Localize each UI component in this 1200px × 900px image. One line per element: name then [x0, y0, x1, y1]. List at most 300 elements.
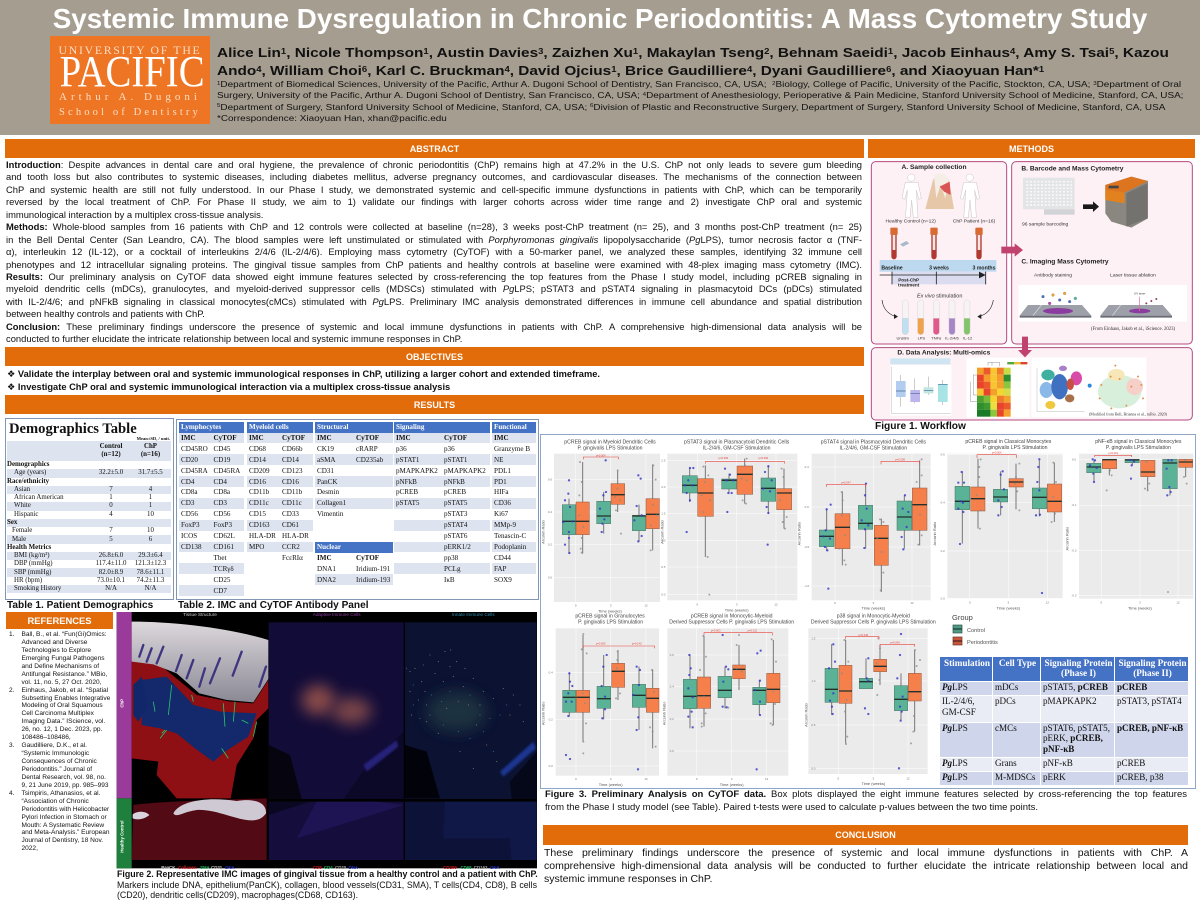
- table: myeloid cells: CD16: [249, 478, 266, 486]
- table: lymphocytes: CD19: [214, 456, 230, 464]
- chart: pCREB in myeloid dendritic cells: 0.0: [548, 575, 552, 579]
- patient demographics table: 1: [149, 502, 152, 509]
- affiliations and correspondence: 1Department of Biomedical Sciences, University of the Pacific, Arthur A. Dugoni School of Dentistry, San Francisco, CA, USA; 2Biology, College of Pacific, University of the Pacific, Stockton, CA, USA; 3Department of Oral: [217, 79, 1181, 89]
- patient demographics table: White: [14, 502, 31, 509]
- logo: University of the Pacific: Arthur A. Dugoni: [59, 91, 201, 103]
- table: myeloid cells: CD16: [282, 478, 299, 486]
- table: stimulation and signaling proteins: Grans: [995, 758, 1017, 768]
- chart: pCREB in granulocytes: p=0.140: [632, 642, 642, 646]
- chart: pCREB in granulocytes: p=0.005: [596, 642, 606, 646]
- chart: pSTAT3 in plasmacytoid dendritic cells: 1.5: [661, 512, 666, 516]
- table: stimulation and signaling proteins: (Phase I): [1061, 668, 1096, 678]
- chart: pNF-kB in classical monocytes: -0.1: [1071, 503, 1077, 507]
- table: functional: PD1: [494, 478, 507, 486]
- title: Systemic Immune Dysregulation in Chronic Periodontitis: A Mass Cytometry Study: [53, 3, 1147, 34]
- chart: pCREB in classical monocytes: p=0.004: [992, 451, 1002, 455]
- caption: table 2: Table 2. IMC and CyTOF Antibody Panel: [178, 600, 368, 611]
- strip: ChP: ChP: [120, 699, 125, 708]
- patient demographics table: African American: [14, 494, 64, 501]
- chart: p38 in monocytic MDSCs: [804, 613, 936, 786]
- table: structural: Structural: [317, 423, 349, 431]
- table: functional: MMp-9: [494, 521, 516, 529]
- chart: pCREB in monocytic MDSCs: p=0.003: [711, 629, 721, 633]
- references list: 4.: [9, 790, 14, 797]
- legend: marker colours: [161, 865, 501, 870]
- table: nuclear: Nuclear: [317, 543, 341, 551]
- heading: conclusion: CONCLUSION: [835, 830, 896, 840]
- table: lymphocytes: CD8a: [181, 488, 198, 496]
- patient demographics table: 117.4±11.0: [96, 560, 126, 567]
- table: myeloid cells: CD61: [282, 521, 299, 529]
- chart: pSTAT3 in plasmacytoid dendritic cells: 0.0: [661, 592, 666, 596]
- table: lymphocytes: TCRγδ: [214, 565, 234, 573]
- patient demographics table: 6: [149, 536, 152, 543]
- chart: p38 in monocytic MDSCs: 0: [837, 776, 839, 780]
- table: nuclear: DNA2: [317, 576, 336, 584]
- table: structural: Desmin: [317, 488, 339, 496]
- references list: Mouth: A Systematic Review: [22, 822, 104, 828]
- chart: pCREB in myeloid dendritic cells: Arcsinh Ratio: [541, 519, 546, 544]
- patient demographics table: 5: [109, 536, 113, 543]
- table: structural: [315, 422, 393, 518]
- chart: pSTAT4 in plasmacytoid dendritic cells: -0.5: [804, 545, 810, 549]
- abstract text: and tooth loss but also contributes to systemic diseases, including diabetes mellitus, adverse pregnancy outcomes, and cardiovascular diseases. The mechanisms of the connection between: [6, 171, 862, 182]
- strip: Healthy Control: Healthy Control: [120, 821, 125, 853]
- chart: pCREB in myeloid dendritic cells: Time (weeks): [598, 609, 623, 614]
- table: myeloid cells: HLA-DR: [282, 532, 309, 540]
- timeline: 3 months: [973, 265, 996, 271]
- patient demographics table: SBP (mmHg): [14, 569, 51, 576]
- table: lymphocytes: CyTOF: [214, 434, 237, 442]
- table: signaling: pp38: [444, 554, 458, 562]
- chart: pCREB in myeloid dendritic cells: [541, 440, 660, 614]
- caption: figure 3: from the Phase I study model (see Table). Paired t-tests were used to calculate p-values between the two time points.: [545, 802, 1038, 813]
- table: lymphocytes: Tbet: [214, 554, 226, 562]
- references list: 26, no. 12, 1 Dec. 2023, pp.: [22, 726, 102, 733]
- table: signaling: pCREB: [444, 488, 466, 496]
- table: stimulation and signaling proteins: pDCs: [995, 696, 1016, 706]
- table: signaling: Signaling: [396, 423, 424, 431]
- patient demographics table: Smoking History: [14, 585, 61, 592]
- timeline: treatment: [898, 282, 920, 287]
- table: functional: NE: [494, 456, 503, 464]
- references list: 2022,: [22, 845, 38, 852]
- chart: pSTAT4 in plasmacytoid dendritic cells: 0.4: [805, 465, 809, 469]
- chart: pSTAT4 in plasmacytoid dendritic cells: [797, 440, 931, 610]
- references list: “Association of Chronic: [22, 798, 89, 805]
- panel: antibody panel table: [176, 419, 539, 600]
- table: myeloid cells: FcεRIα: [282, 554, 303, 562]
- figure 3: box plots: [540, 434, 1196, 789]
- patient demographics table: Control: [100, 442, 122, 450]
- panel D: data analysis: (Modified from Bell, Brianna et al., mBio. 2020): [1089, 411, 1168, 417]
- heading: objectives: OBJECTIVES: [406, 352, 463, 362]
- icon: mass cytometer: [1105, 177, 1148, 228]
- table: stimulation and signaling proteins: pCREB: [1117, 682, 1147, 692]
- legend: group: Group: [952, 613, 973, 622]
- caption: figure 2: [117, 869, 538, 900]
- table: myeloid cells: CyTOF: [282, 434, 305, 442]
- chart: pCREB in granulocytes: 0.2: [549, 717, 553, 721]
- table: functional: Podoplanin: [494, 543, 526, 551]
- chart: p38 in monocytic MDSCs: p38 signal in Monocytic-Myeloid: [837, 613, 910, 619]
- chart: pCREB in monocytic MDSCs: [661, 613, 794, 787]
- chart: pNF-kB in classical monocytes: p=0.021: [1108, 451, 1119, 455]
- table: functional: SOX9: [494, 576, 512, 584]
- table: myeloid cells: CD163: [249, 521, 270, 529]
- table: myeloid cells: CD66b: [282, 445, 302, 453]
- table: signaling: p36: [444, 445, 455, 453]
- chart: pCREB in monocytic MDSCs: 0.4: [670, 684, 674, 688]
- references list: Technologies to Explore: [22, 647, 91, 654]
- references list: 9, 21 June 2019, pp. 985–993: [22, 782, 109, 789]
- timeline: Baseline: [881, 265, 903, 271]
- table: stimulation and signaling proteins: Signaling Protein: [1044, 658, 1112, 668]
- chart: pCREB in classical monocytes: P. gingivalis LPS Stimulation: [983, 445, 1048, 451]
- table: stimulation and signaling proteins: pSTAT5, pCREB: [1043, 682, 1108, 692]
- table: lymphocytes: CD45RO: [181, 445, 208, 453]
- abstract text: ChP and systemic health are still not fully understood. In our Phase I study, we demonstrated systemic and cell-specific immune dysfunctions in patients with ChP, which can be temporarily: [6, 184, 862, 195]
- table: myeloid cells: Myeloid cells: [249, 423, 289, 431]
- chart: pSTAT3 in plasmacytoid dendritic cells: pSTAT3 signal in Plasmacytoid Dendritic Cells: [684, 440, 790, 446]
- panel D: data analysis: D. Data Analysis: Multi-omics: [897, 349, 991, 356]
- timeline: Post-ChP: [898, 277, 919, 282]
- panel: demographics table: [5, 418, 174, 600]
- table: stimulation and signaling proteins: PgLPS: [942, 682, 968, 692]
- patient demographics table: N/A: [145, 585, 156, 592]
- table: myeloid cells: CD11b: [249, 488, 269, 496]
- references list: Consequences of Chronic: [22, 758, 97, 765]
- table: lymphocytes: FoxP3: [181, 521, 200, 529]
- panel A: sample collection: IL-12: [963, 335, 973, 340]
- strip: ChP: [117, 612, 132, 798]
- table: signaling: pSTAT1: [444, 456, 467, 464]
- table: stimulation and signaling proteins: Stimulation: [944, 658, 990, 668]
- references list: Subsetting Enables Integrative: [22, 694, 110, 702]
- references list: 1.: [9, 631, 14, 638]
- table: stimulation and signaling proteins: M-MDSCs: [995, 772, 1035, 782]
- chart: p38 in monocytic MDSCs: 1.5: [811, 636, 816, 640]
- table: nuclear: Iridium-193: [356, 576, 390, 584]
- table: signaling: IMC: [396, 434, 411, 442]
- heading: references: REFERENCES: [27, 615, 92, 626]
- abstract text: phenotypes and 12 intracellular signaling proteins. The gingival tissue samples from ChP patients and healthy controls at baseline were examined with 48-plex imaging mass cytometry (IMC).: [6, 258, 862, 270]
- panel B and C: mass cytometry: UV laser: [1134, 291, 1145, 295]
- chart: pCREB in classical monocytes: 12: [1046, 600, 1049, 604]
- chart: pNF-kB in classical monocytes: -0.3: [1071, 593, 1077, 597]
- table: lymphocytes: CD20: [181, 456, 198, 464]
- table: stimulation and signaling proteins: pERK: [1043, 772, 1066, 782]
- objectives list: ❖ Investigate ChP oral and systemic immunological interaction via a multiplex cross-tissue analysis: [7, 382, 450, 393]
- patient demographics table: 29.3±6.4: [138, 552, 163, 559]
- table: stimulation and signaling proteins: [940, 657, 1188, 785]
- chart: pCREB in monocytic MDSCs: 3: [731, 777, 733, 781]
- chart: pCREB in granulocytes: 12: [644, 777, 648, 781]
- abstract text: Methods: Whole-blood samples from 16 patients with ChP and 12 controls were collected at baseline (n=28), 3 weeks post-ChP treatment (n= 25), and 3 months post-ChP treatment (n= 25): [6, 221, 862, 232]
- references list: Ball, B., et al. “Fun(Gi)Omics:: [22, 631, 107, 638]
- references list: Advanced and Diverse: [22, 639, 87, 646]
- abstract text: reversed by the local treatment of ChP. For Phase II study, we aim to 1) validate our findings with larger cohorts across wider time range and 2) investigate ChP oral and systemic: [6, 196, 862, 207]
- references list: Tsimpiris, Athanasios, et al.: [22, 790, 100, 797]
- patient demographics table: 31.7±5.5: [138, 469, 163, 476]
- patient demographics table: Male: [12, 536, 26, 543]
- chart: pCREB in classical monocytes: 0.2: [941, 549, 945, 553]
- chart: pCREB in granulocytes: pCREB signal in Granulocytes: [575, 613, 645, 619]
- table: lymphocytes: CD25: [214, 576, 230, 584]
- panel A: sample collection: LPS: [918, 335, 925, 340]
- panel: innate immune cells: [405, 612, 537, 860]
- panel B and C: mass cytometry: B. Barcode and Mass Cytometry: [1021, 166, 1124, 173]
- chart: pSTAT4 in plasmacytoid dendritic cells: p=0.047: [841, 481, 851, 485]
- chart: pSTAT4 in plasmacytoid dendritic cells: IL-2/4/6, GM-CSF Stimulation: [840, 446, 907, 452]
- chart: pSTAT4 in plasmacytoid dendritic cells: Time (weeks): [861, 605, 886, 610]
- patient demographics table: 74.2±11.3: [137, 577, 164, 584]
- chart: pSTAT4 in plasmacytoid dendritic cells: Arcsinh Ratio: [797, 521, 802, 546]
- patient demographics table: Female: [12, 527, 32, 534]
- chart: pCREB in myeloid dendritic cells: 0.6: [548, 478, 552, 482]
- chart: pSTAT4 in plasmacytoid dendritic cells: pSTAT4 signal in Plasmacytoid Dendritic Cells: [821, 440, 926, 446]
- chart: pCREB in classical monocytes: pCREB signal in Classical Monocytes: [965, 439, 1052, 445]
- chart: pCREB in monocytic MDSCs: 0.6: [670, 653, 674, 657]
- table: signaling: PCLg: [444, 565, 461, 573]
- table: stimulation and signaling proteins: pCREB: [1117, 758, 1145, 768]
- patient demographics table: Health Metrics: [7, 544, 51, 551]
- patient demographics table: Asian: [14, 486, 30, 493]
- table: signaling: pSTAT3: [444, 510, 467, 518]
- heading: abstract: [5, 139, 864, 158]
- chart: pCREB in myeloid dendritic cells: pCREB signal in Myeloid Dendritic Cells: [564, 440, 656, 446]
- table: functional: PDL1: [494, 467, 511, 475]
- chart: pSTAT3 in plasmacytoid dendritic cells: 1.0: [661, 538, 666, 542]
- panel A: sample collection: [871, 162, 1007, 344]
- panel A: sample collection: TNFα: [931, 335, 942, 340]
- chart: pCREB in granulocytes: 0: [575, 777, 577, 781]
- table: nuclear: DNA1: [317, 565, 336, 573]
- panel A: sample collection: IL-2/4/6: [945, 335, 960, 340]
- chart: pNF-kB in classical monocytes: 0: [1100, 600, 1102, 604]
- patient demographics table: BMI (kg/m²): [14, 552, 50, 559]
- chart: pSTAT3 in plasmacytoid dendritic cells: 0.5: [661, 565, 666, 569]
- table: signaling: CyTOF: [444, 434, 467, 442]
- mini tSNE plots: [1031, 357, 1146, 417]
- patient demographics table: HR (bpm): [14, 577, 42, 584]
- authors: [217, 46, 1169, 78]
- table: functional: FAP: [494, 565, 506, 573]
- table: structural: CD31: [317, 467, 334, 475]
- chart: pSTAT4 in plasmacytoid dendritic cells: p=0.009: [895, 457, 905, 461]
- patient demographics table: 121.3±12.3: [135, 560, 166, 567]
- strip: Healthy Control: [117, 798, 132, 868]
- references list: Periodontitis.” Journal of: [22, 766, 92, 773]
- table: stimulation and signaling proteins: Signaling Protein: [1118, 658, 1186, 668]
- panel A: sample collection: Unstim: [896, 335, 910, 340]
- references list: Antifungal Resistance.” MBio,: [22, 671, 107, 678]
- abstract text: with IL-2/4/6; and pNFkB signaling in classical monocytes(cMCs) stimulated with PgLPS. Preliminary IMC analysis demonstrated differences in immune cell abundance and spatial distribution: [6, 296, 862, 307]
- patient demographics table: 26.8±6.0: [99, 552, 123, 559]
- chart: pCREB in monocytic MDSCs: 12: [765, 777, 769, 781]
- panel B and C: mass cytometry: C. Imaging Mass Cytometry: [1021, 258, 1109, 265]
- references list: “Systemic Immunologic: [22, 750, 89, 757]
- chart: pCREB in monocytic MDSCs: p=0.012: [747, 629, 758, 633]
- chart: pNF-kB in classical monocytes: P. gingivalis LPS Stimulation: [1106, 445, 1171, 451]
- heading: results: RESULTS: [414, 400, 455, 410]
- affiliations and correspondence: Surgery, University of the Pacific, Arthur A. Dugoni School of Dentistry, San Francisco, CA, USA; 4Department of Anesthesiology, Perioperative & Pain Medicine, Stanford University School of Medicine, Stanford, CA, USA;: [217, 90, 1183, 100]
- conclusion text: These preliminary findings underscore the presence of systemic and local immune dysfunctions in patients with ChP. A: [544, 847, 1188, 859]
- table: stimulation and signaling proteins: PgLPS: [942, 772, 968, 782]
- table: nuclear: CyTOF: [356, 554, 379, 562]
- table: myeloid cells: CCR2: [282, 543, 300, 551]
- table: myeloid cells: CD15: [249, 510, 266, 518]
- panel A: sample collection: Healthy Control (n=12): [886, 219, 936, 225]
- objectives list: [7, 369, 600, 393]
- patient demographics table: 4: [149, 486, 152, 493]
- chart: pSTAT3 in plasmacytoid dendritic cells: 2.0: [661, 485, 666, 489]
- table: lymphocytes: IMC: [181, 434, 196, 442]
- chart: pCREB in monocytic MDSCs: Arcsinh Ratio: [661, 701, 666, 725]
- patient demographics table: 7: [109, 527, 113, 534]
- chart: pCREB in classical monocytes: 0.6: [941, 453, 945, 457]
- panel A: sample collection: Ex vivo stimulation: [917, 294, 962, 300]
- panel: adaptive immune cells: Adaptive Immune Cells: [313, 612, 361, 617]
- chart: pNF-kB in classical monocytes: 0.0: [1072, 457, 1076, 461]
- legend: group: Periodontitis: [967, 640, 998, 646]
- patient demographics table: 82.0±8.9: [99, 569, 123, 576]
- chart: pNF-kB in classical monocytes: -0.2: [1071, 548, 1077, 552]
- heading: references: [6, 612, 113, 629]
- table: structural: PanCK: [317, 478, 338, 486]
- table: lymphocytes: CD45RA: [181, 467, 208, 475]
- references list: Pylori Infection in Stomach or: [22, 814, 107, 821]
- conclusion text: [544, 847, 1188, 885]
- chart: pCREB in monocytic MDSCs: 0.0: [670, 749, 674, 753]
- table: stimulation and signaling proteins: cMCs: [995, 723, 1017, 733]
- table: lymphocytes: CD3: [181, 499, 194, 507]
- table: lymphocytes: CD8a: [214, 488, 230, 496]
- table: myeloid cells: CD14: [249, 456, 266, 464]
- heading: results: [5, 395, 864, 414]
- conclusion text: systemic immune responses in ChP.: [544, 873, 712, 885]
- chart: pSTAT3 in plasmacytoid dendritic cells: 3: [736, 602, 738, 606]
- figure 1: workflow: [870, 161, 1193, 420]
- patient demographics table: Demographics: [7, 461, 50, 468]
- table: signaling: pSTAT1: [396, 456, 419, 464]
- panel B and C: mass cytometry: Laser tissue ablation: [1110, 273, 1156, 279]
- affiliations and correspondence: [217, 79, 1183, 123]
- timeline: 3 weeks: [929, 265, 949, 271]
- chart: p38 in monocytic MDSCs: Derived Suppressor Cells P. gingivalis LPS Stimulation: [811, 620, 936, 626]
- table: stimulation and signaling proteins: mDCs: [995, 682, 1018, 692]
- chart: pNF-kB in classical monocytes: [1064, 439, 1193, 610]
- chart: p38 in monocytic MDSCs: 0.5: [811, 723, 816, 727]
- table: lymphocytes: CD56: [181, 510, 198, 518]
- chart: pCREB in myeloid dendritic cells: 0.4: [548, 510, 552, 514]
- panel: innate immune cells: Innate Immune Cells: [452, 612, 495, 617]
- table: functional: HIFa: [494, 488, 509, 496]
- chart: pCREB in classical monocytes: [932, 439, 1063, 610]
- legend: group: [952, 613, 998, 646]
- figure 2: IMC images: [116, 612, 537, 869]
- table: lymphocytes: CD138: [181, 543, 202, 551]
- abstract text: Introduction: Despite advances in dental care and oral hygiene, the prevalence of chronic periodontitis (ChP) remains high at 47.2% in the U.S. ChP not only leads to severe gum bleeding: [6, 159, 862, 170]
- table: stimulation and signaling proteins: pNF-κB: [1043, 758, 1073, 768]
- chart: p38 in monocytic MDSCs: 3: [872, 776, 874, 780]
- table: signaling: pSTAT4: [444, 521, 467, 529]
- table: myeloid cells: CD11c: [249, 499, 269, 507]
- caption: figure 2: (CD20), dendritic cells(CD209), macrophages(CD68, CD163).: [117, 890, 358, 900]
- table: nuclear: IMC: [317, 554, 332, 562]
- patient demographics table: (n=16): [141, 451, 160, 458]
- panel: tissue structure: Tissue Structure: [183, 612, 217, 617]
- references list: Periodontitis with Helicobacter: [22, 806, 109, 813]
- patient demographics table: Age (years): [14, 469, 46, 476]
- table: stimulation and signaling proteins: pSTAT6, pSTAT5,: [1043, 723, 1110, 733]
- table: signaling: pCREB: [396, 488, 418, 496]
- chart: pSTAT3 in plasmacytoid dendritic cells: 0: [696, 602, 698, 606]
- legend: group: Control: [967, 628, 985, 634]
- mini boxplot: [890, 358, 951, 416]
- references list: vol. 11, no. 5, 27 Oct. 2020,: [22, 679, 101, 686]
- chart: pCREB in monocytic MDSCs: Derived Suppressor Cells P. gingivalis LPS Stimulation: [669, 620, 794, 626]
- table: stimulation and signaling proteins: Cell Type: [999, 658, 1036, 668]
- abstract text: Conclusion: These preliminary findings underscore the presence of systemic and local immune dysfunctions in patients with ChP. A comprehensive high-dimensional data analysis will be: [6, 321, 862, 332]
- abstract text: [6, 159, 862, 344]
- chart: p38 in monocytic MDSCs: Arcsinh Ratio: [804, 702, 809, 727]
- chart: pCREB in granulocytes: [541, 613, 659, 787]
- chart: pSTAT3 in plasmacytoid dendritic cells: [659, 440, 797, 612]
- references list: 2.: [9, 687, 14, 694]
- logo: University of the Pacific: School of Dentistry: [59, 107, 201, 118]
- demographics heading: Demographics Table: [9, 421, 137, 437]
- patient demographics table: 1: [149, 494, 152, 501]
- table: myeloid cells: MPO: [249, 543, 264, 551]
- patient demographics table: ChP: [144, 442, 157, 450]
- table: nuclear: [315, 542, 393, 585]
- chart: pSTAT4 in plasmacytoid dendritic cells: -1.0: [804, 584, 810, 588]
- panel B and C: mass cytometry: (From Einhaus, Jakob et al., iScience. 2023): [1091, 327, 1175, 332]
- table: signaling: pSTAT5: [396, 499, 419, 507]
- logo: University of the Pacific: [50, 36, 210, 124]
- chart: pCREB in monocytic MDSCs: 0: [696, 777, 698, 781]
- table: myeloid cells: CD209: [249, 467, 270, 475]
- table: stimulation and signaling proteins: IL-2/4/6,: [942, 696, 975, 706]
- references list: Emerging Fungal Pathogens: [22, 655, 104, 662]
- patient demographics table: Sex: [7, 519, 17, 526]
- table: lymphocytes: FoxP3: [214, 521, 232, 529]
- logo: University of the Pacific: UNIVERSITY OF THE: [59, 43, 201, 57]
- table: stimulation and signaling proteins: pNF-κB: [1043, 744, 1074, 754]
- table: stimulation and signaling proteins: PgLPS: [942, 758, 968, 768]
- table: lymphocytes: CD62L: [214, 532, 235, 540]
- table: lymphocytes: CD45: [214, 445, 230, 453]
- patient demographics table: 10: [147, 527, 154, 534]
- chart: pCREB in classical monocytes: Arcsinh Ratio: [932, 521, 937, 546]
- panel B and C: mass cytometry: Antibody staining: [1034, 273, 1072, 279]
- table: signaling: pMAPKAPK2: [396, 467, 438, 475]
- header band: [0, 0, 1200, 135]
- table: structural: CD235ab: [356, 456, 383, 464]
- table: myeloid cells: HLA-DR: [249, 532, 276, 540]
- heading: methods: METHODS: [1009, 144, 1054, 154]
- table: structural: CK19: [317, 445, 334, 453]
- caption: figure 3: [545, 789, 1187, 813]
- patient demographics table: Hispanic: [14, 511, 38, 518]
- table: myeloid cells: CD68: [249, 445, 266, 453]
- patient demographics table: [7, 441, 171, 593]
- logo: University of the Pacific: PACIFIC: [60, 47, 205, 96]
- table: signaling: pNFkB: [444, 478, 465, 486]
- chart: pCREB in myeloid dendritic cells: 3: [610, 604, 612, 608]
- table: functional: Functional: [494, 423, 527, 431]
